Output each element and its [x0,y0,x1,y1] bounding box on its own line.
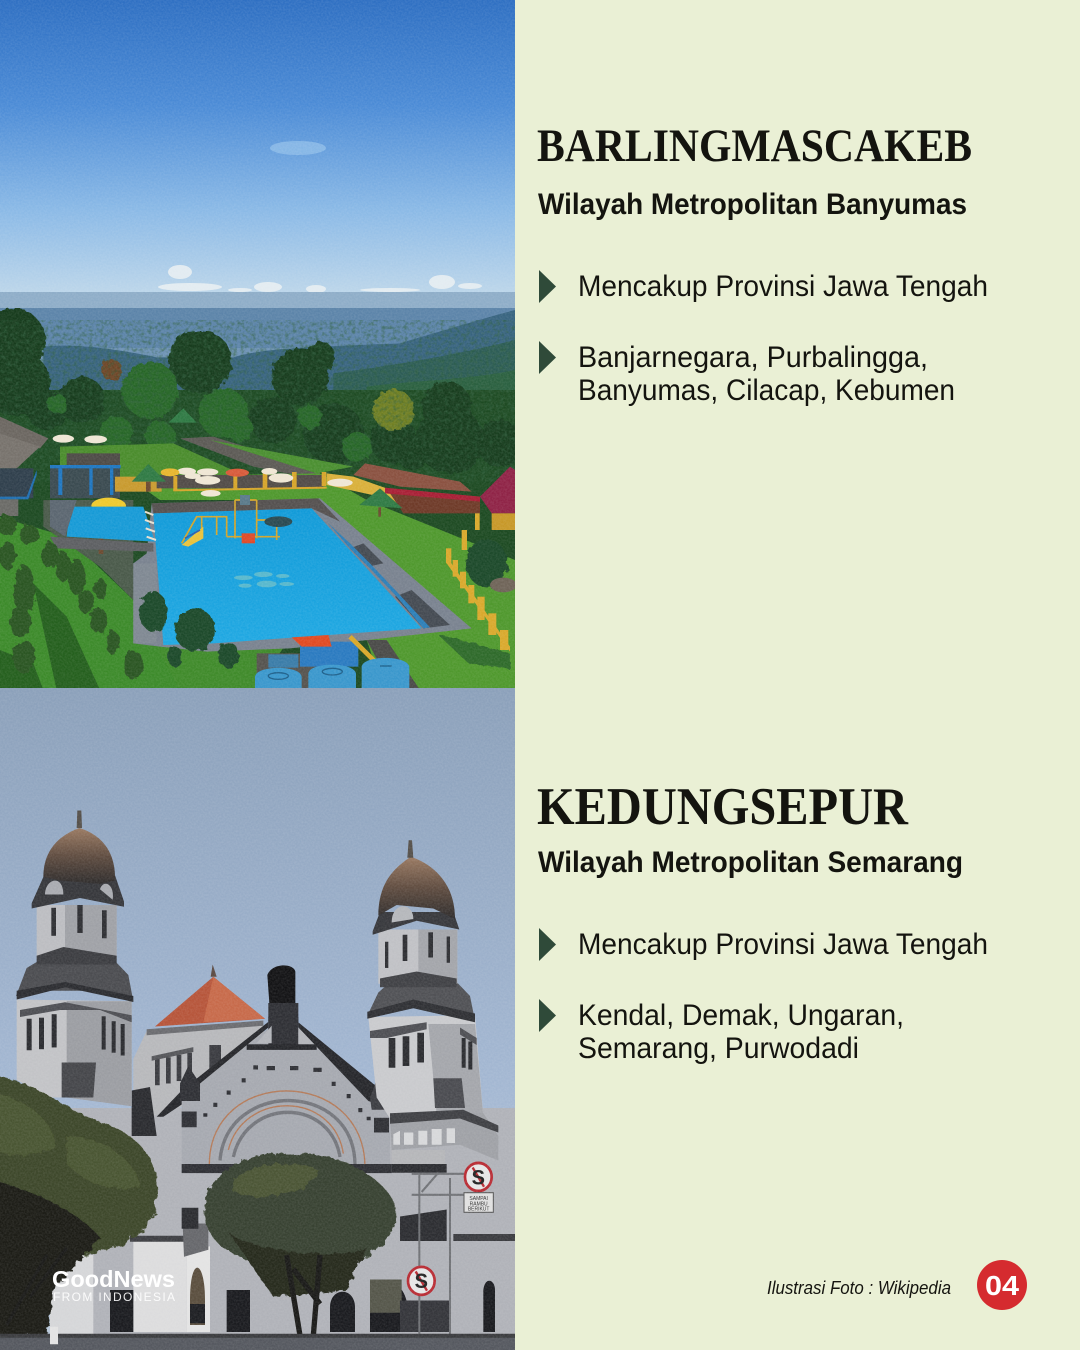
bullet text: coverage: Mencakup Provinsi Jawa Tengah [578,270,988,303]
bullet text: regencies: Banyumas, Cilacap, Kebumen [578,374,955,407]
bullet text: coverage: Mencakup Provinsi Jawa Tengah [578,928,988,961]
pool deck [133,498,472,652]
page number badge [977,1260,1027,1310]
yellow building with tile roof [326,473,396,503]
bullet text: regencies [578,341,955,407]
left buildings [0,417,48,448]
bullet arrow [539,999,556,1032]
right tower [367,840,498,1164]
water tanks and pump house [256,653,317,688]
ground floor arches [130,1236,187,1242]
subheading: Wilayah Metropolitan Semarang [538,846,963,879]
fence and pavement [0,1334,515,1338]
bullet text: regencies [578,999,904,1065]
bullet text: regencies: Semarang, Purwodadi [578,1032,859,1065]
logo: GoodNews from Indonesia [52,1266,175,1304]
left tower [16,810,133,1106]
street poles and signs [412,1173,465,1336]
photo: Lawang Sewu colonial building [0,688,515,1350]
logo: GoodNews from Indonesia: FROM INDONESIA [53,1290,175,1304]
photo: Lawang Sewu colonial building: SAMPAI [469,1196,488,1202]
photo: Lawang Sewu colonial building: RAMBU [470,1201,488,1207]
bullet arrow [539,341,556,374]
brick arches [209,1091,365,1168]
lower facade [50,1108,515,1339]
subheading: Wilayah Metropolitan Banyumas [538,188,967,221]
main pool water [153,508,422,645]
photo: Lawang Sewu colonial building: BERIKUT [468,1206,489,1213]
photo: Lawang Sewu colonial building: S [415,1270,428,1293]
fence posts [446,513,510,652]
panel: Barlingmascakeb [537,120,988,407]
bullet text: regencies: Banjarnegara, Purbalingga, [578,341,928,374]
centre tree [204,1153,396,1268]
left tree [0,1073,396,1336]
photo credit: Ilustrasi Foto : Wikipedia [767,1278,951,1298]
distant blue building [495,1108,515,1154]
red pyramid roof [155,977,265,1026]
logo: GoodNews from Indonesia: GoodNews [52,1266,175,1292]
panel: Kedungsepur [537,778,988,1065]
page number badge: 04 [985,1270,1019,1301]
gazebos [132,408,402,508]
umbrellas [53,435,353,497]
bullet arrow [539,928,556,961]
bullet text: regencies: Kendal, Demak, Ungaran, [578,999,904,1032]
photo: Lawang Sewu colonial building: S [472,1166,485,1189]
photo: hillside swimming pool resort [0,0,523,690]
slope trees [0,515,510,679]
bullet arrow [539,270,556,303]
water playground [182,500,280,543]
heading: BARLINGMASCAKEB [537,120,972,172]
gable [182,1028,390,1164]
lawns [60,443,231,477]
heading: KEDUNGSEPUR [537,778,909,836]
